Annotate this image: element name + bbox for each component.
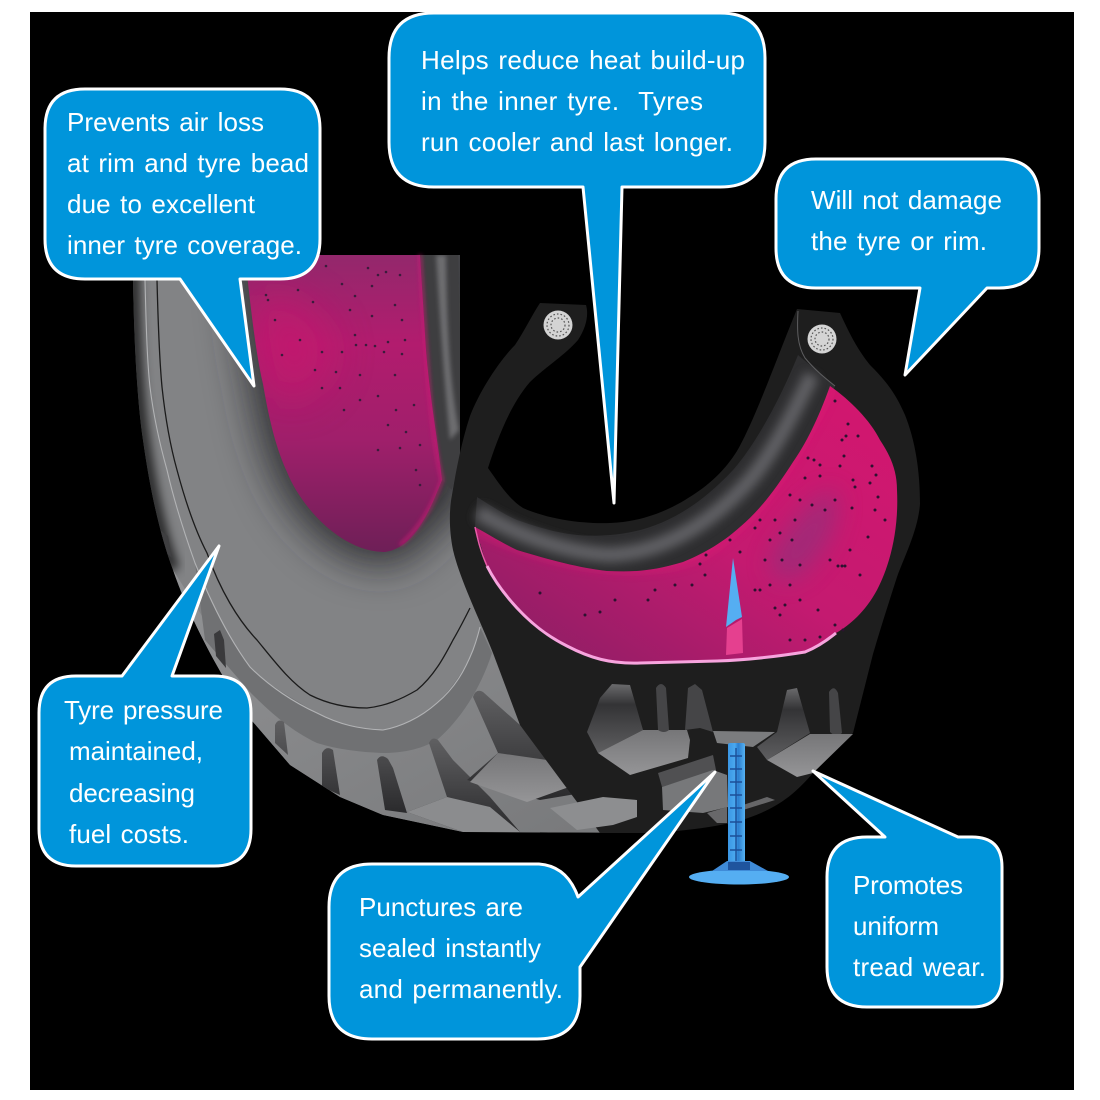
tread slots xyxy=(275,721,407,813)
callout: no damage: Will not damage xyxy=(811,185,1002,215)
pink sealant, cross-section xyxy=(475,386,897,663)
sidewall groove line xyxy=(157,280,470,708)
outer edge fade xyxy=(133,255,173,570)
callout: tyre pressure: decreasing xyxy=(69,778,195,808)
callout: rim and bead xyxy=(45,89,320,386)
callout: punctures: sealed instantly xyxy=(359,933,541,963)
callout: rim and bead: inner tyre coverage. xyxy=(67,230,302,260)
inner liner xyxy=(475,355,835,571)
nail xyxy=(689,743,789,884)
rear tube band xyxy=(421,255,452,490)
tread lobes base xyxy=(173,570,640,833)
callout: rim and bead: due to excellent xyxy=(67,189,256,219)
tyre cross-section xyxy=(450,303,920,833)
callout: punctures xyxy=(329,772,715,1039)
tread blocks, cross-section xyxy=(550,684,853,830)
callout: heat build-up xyxy=(389,13,765,503)
callout: tyre pressure: maintained, xyxy=(69,736,203,766)
callout: heat build-up: run cooler and last longer. xyxy=(421,127,733,157)
callout: rim and bead: Prevents air loss xyxy=(67,107,264,137)
callout: tread wear: Promotes xyxy=(853,870,963,900)
tyre illustration xyxy=(120,230,920,884)
callout: tyre pressure: Tyre pressure xyxy=(64,695,223,725)
callout: no damage: the tyre or rim. xyxy=(811,226,987,256)
tread band xyxy=(195,563,492,753)
callout: tread wear xyxy=(813,771,1002,1007)
callout: punctures: Punctures are xyxy=(359,892,523,922)
puncture spike xyxy=(726,558,742,627)
band highlight line xyxy=(145,280,480,730)
callout: tyre pressure: fuel costs. xyxy=(69,819,189,849)
tread block faces xyxy=(470,753,566,802)
callout: heat build-up: in the inner tyre. Tyres xyxy=(421,86,703,116)
pink sealant, rear view xyxy=(245,255,442,552)
callout: tread wear: uniform xyxy=(853,911,939,941)
callout: heat build-up: Helps reduce heat build-up xyxy=(421,45,745,75)
shading around sealant xyxy=(245,230,470,552)
callout: punctures: and permanently. xyxy=(359,974,563,1004)
bead wires xyxy=(544,310,836,354)
callout: no damage xyxy=(776,159,1039,375)
callout: tyre pressure xyxy=(39,546,251,866)
callout: rim and bead: at rim and tyre bead xyxy=(67,148,309,178)
callout: tread wear: tread wear. xyxy=(853,952,986,982)
tyre sidewall xyxy=(133,255,600,833)
